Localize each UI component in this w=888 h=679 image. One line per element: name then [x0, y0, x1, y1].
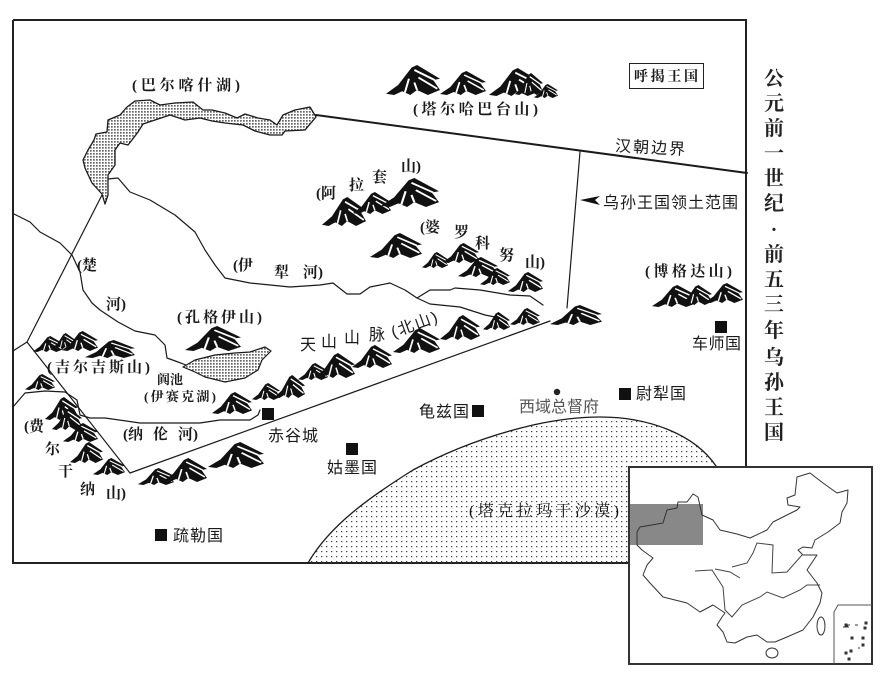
label: Tianshan: 脉	[369, 326, 385, 344]
city: Gumo: 姑墨国	[327, 459, 377, 477]
label: Ili River	[233, 257, 323, 281]
title: vertical text	[764, 68, 786, 444]
inset map of China	[629, 467, 872, 664]
rivers	[695, 543, 820, 617]
label: Ili River: 河)	[303, 264, 323, 281]
label: Kongur: (孔格伊山)	[177, 308, 262, 326]
desert: Taklamakan: (塔克拉玛干沙漠)	[469, 501, 619, 520]
label: Tianshan: 天	[300, 337, 316, 354]
title: vertical text: 纪	[764, 192, 784, 215]
label: Tianshan	[300, 308, 440, 354]
mountains: Pokhoro	[370, 233, 543, 292]
box: Huhe kingdom	[630, 64, 704, 88]
river: Chu	[14, 214, 186, 365]
lake: Balkhash	[83, 100, 316, 204]
label: Issyk-Kul	[144, 372, 216, 404]
label: Han border: 汉朝边界	[615, 137, 686, 159]
label: Chu River: (楚	[77, 256, 97, 274]
title: vertical text: 世	[764, 167, 784, 190]
desert: Taklamakan	[308, 417, 716, 563]
city: Protectorate of the Western Regions: 西域总督府	[519, 398, 599, 416]
city: Shule: 疏勒国	[173, 527, 223, 545]
mountains: Tarbagatai	[386, 65, 558, 98]
label: Kirgiz: (吉尔吉斯山)	[47, 358, 150, 376]
China outline	[637, 473, 848, 643]
label: Chu River	[77, 256, 126, 313]
label: Pokhoro: 山)	[525, 254, 545, 271]
label: Fergana: 山)	[106, 485, 126, 502]
city: Cheshi	[692, 321, 741, 353]
title: vertical text: 元	[764, 92, 784, 115]
title: vertical text: 前	[764, 243, 784, 266]
label: Naryn River	[123, 425, 198, 443]
label: Alatau: 拉	[349, 176, 364, 194]
label: Wusun territory: 乌孙王国领土范围	[603, 194, 738, 212]
Hainan	[766, 648, 778, 658]
river: Ili	[108, 178, 543, 318]
label: Fergana	[24, 417, 126, 502]
arrow: Wusun territory	[580, 196, 600, 205]
Taiwan	[817, 617, 825, 635]
label: Alatau: 套	[372, 168, 387, 186]
Wusun territory boundary	[13, 152, 580, 473]
title: vertical text: 王	[764, 396, 784, 419]
label: Tianshan: 山	[344, 329, 360, 347]
city: Gumo	[327, 443, 377, 477]
label: Fergana: (费	[24, 417, 45, 435]
label: Issyk-Kul: 阗池	[157, 372, 183, 387]
mountains: Kirgiz	[33, 331, 135, 358]
label: Issyk-Kul: (伊赛克湖)	[144, 389, 216, 404]
Han dynasty border	[316, 115, 747, 173]
mountains: small peak	[25, 374, 55, 390]
label: Balkhash Lake: (巴尔喀什湖)	[132, 76, 240, 94]
title: vertical text: 公	[764, 68, 784, 90]
mountains: Alatau	[322, 178, 439, 226]
label: Ili River: (伊	[233, 257, 253, 274]
title: vertical text: ·	[771, 219, 777, 241]
label: Pokhoro: 罗	[454, 224, 469, 241]
label: Tianshan: 山	[321, 333, 337, 351]
title: vertical text: 前	[764, 117, 784, 140]
label: Pokhoro: (婆	[420, 218, 441, 236]
box: Huhe kingdom: 呼揭王国	[634, 68, 698, 85]
title: vertical text: 年	[764, 318, 784, 342]
label: Fergana: 纳	[80, 480, 95, 498]
label: Fergana: 干	[58, 463, 73, 480]
mountains: south Tianshan	[138, 442, 264, 485]
city: Shule	[155, 527, 223, 545]
label: Naryn River: 伦	[153, 425, 168, 443]
mountains: Kongur	[185, 326, 241, 351]
map frame	[13, 20, 746, 563]
mountains: Boguoda	[652, 283, 743, 307]
label: Pokhoro: 努	[499, 246, 514, 264]
city: Kucha: 龟兹国	[419, 403, 469, 421]
label: Pokhoro	[420, 218, 545, 271]
label: Ili River: 犁	[274, 264, 289, 281]
label: Alatau	[316, 158, 421, 202]
city: Chigu: 赤谷城	[268, 427, 318, 445]
city: Weili: 尉犁国	[636, 385, 686, 403]
river: Naryn	[13, 391, 260, 423]
label: Tianshan: (北山)	[389, 308, 440, 342]
highlighted region	[630, 504, 703, 545]
title: vertical text: 乌	[764, 346, 784, 369]
title: vertical text: 五	[764, 269, 784, 291]
city: Protectorate of the Western Regions	[519, 389, 599, 416]
title: vertical text: 孙	[764, 371, 786, 394]
South China Sea inset	[834, 605, 872, 664]
mountains: Tianshan	[212, 305, 602, 414]
label: Boguoda: (博格达山)	[645, 262, 732, 280]
title: vertical text: 国	[764, 421, 784, 444]
title: vertical text: 一	[764, 143, 784, 165]
mountains: Fergana	[45, 397, 125, 475]
label: Tarbagatai: (塔尔哈巴台山)	[413, 100, 538, 118]
title: vertical text: 三	[764, 293, 784, 316]
label: Naryn River: (纳	[123, 425, 143, 443]
label: Fergana: 尔	[45, 440, 61, 458]
lake: Issyk-Kul	[183, 347, 271, 382]
label: Alatau: (阿	[316, 185, 336, 202]
label: Naryn River: 河)	[178, 426, 198, 443]
label: Chu River: 河)	[106, 296, 126, 313]
label: Pokhoro: 科	[475, 235, 490, 252]
label: Alatau: 山)	[401, 158, 421, 175]
city: Cheshi: 车师国	[692, 335, 741, 353]
city: Chigu	[262, 408, 318, 445]
